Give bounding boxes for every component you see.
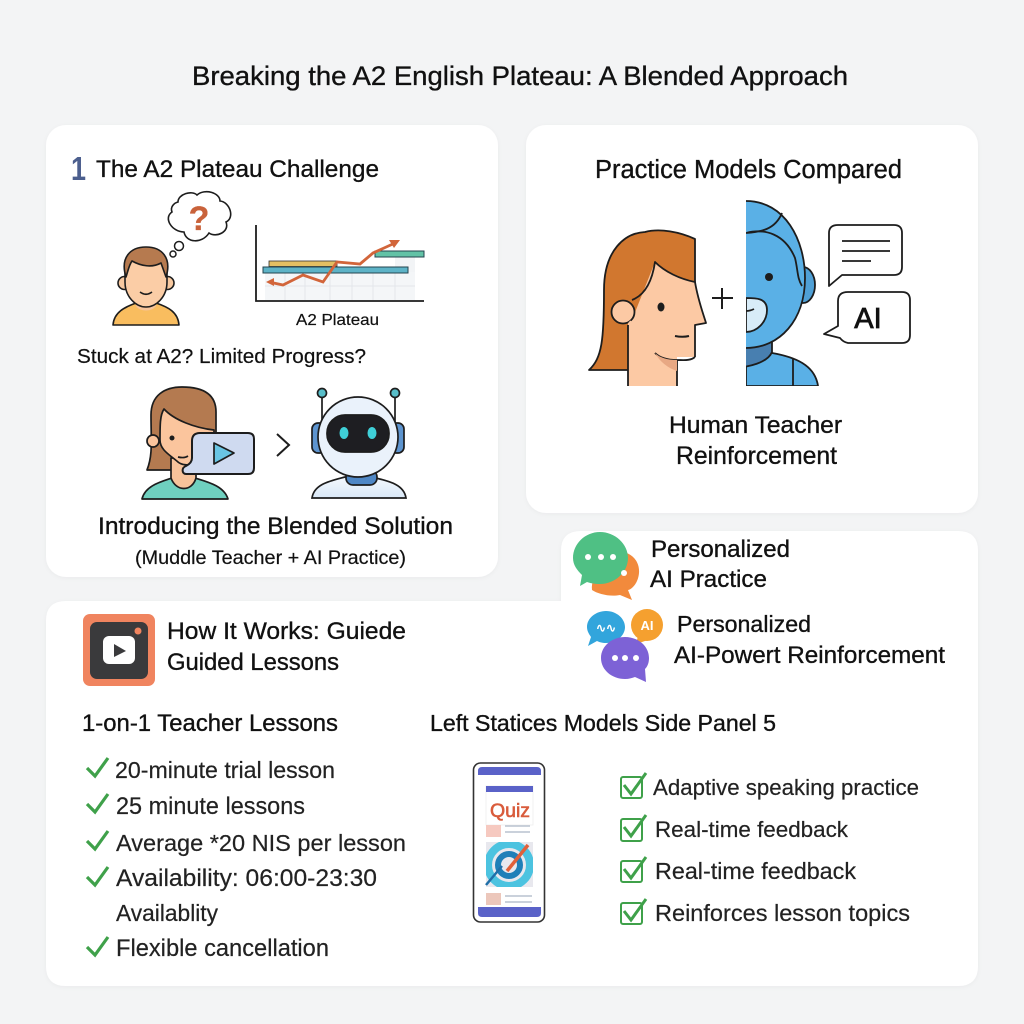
icon: chat bubbles blue, orange and purple: AI bbox=[640, 618, 654, 633]
icon: chat bubbles blue, orange and purple bbox=[587, 609, 663, 682]
heading: how it works bbox=[167, 618, 406, 676]
title: Breaking the A2 English Plateau: A Blended Approach bbox=[192, 60, 848, 91]
list: AI practice features: Real-time feedback bbox=[655, 817, 849, 842]
step number: 1 bbox=[71, 150, 86, 187]
caption line 1: Human Teacher bbox=[669, 412, 842, 439]
list: teacher lesson features bbox=[87, 757, 406, 962]
arrow: chevron bbox=[277, 434, 289, 456]
icon: AI robot half face bbox=[746, 200, 819, 386]
heading: how it works: Guided Lessons bbox=[167, 649, 339, 676]
text: personalized AI-powered reinforcement bbox=[674, 611, 945, 669]
list: AI practice features bbox=[621, 773, 919, 926]
text: personalized AI practice: AI Practice bbox=[650, 566, 767, 593]
icon: teacher with video card bbox=[142, 387, 254, 499]
list: teacher lesson features: Availability: 06:00-23:30 bbox=[116, 865, 377, 892]
panel heading: Practice Models Compared bbox=[595, 156, 902, 184]
panel: practice models compared bbox=[526, 125, 978, 513]
icon: AI speech bubble bbox=[824, 292, 910, 343]
panel: the A2 plateau challenge bbox=[46, 125, 498, 577]
icon: text speech bubble bbox=[829, 225, 902, 286]
list: teacher lesson features: 25 minute lessons bbox=[116, 793, 305, 820]
caption line 2: Reinforcement bbox=[676, 443, 837, 470]
icon: video play bbox=[83, 614, 155, 686]
chart label: A2 Plateau bbox=[296, 312, 379, 329]
text: personalized AI practice: Personalized bbox=[651, 536, 790, 563]
list: AI practice features: Adaptive speaking practice bbox=[653, 775, 919, 800]
panel: how it works bbox=[46, 531, 978, 986]
text: personalized AI practice bbox=[650, 536, 790, 593]
list: AI practice features: Real-time feedback bbox=[655, 858, 856, 884]
subheading: side panel: Left Statices Models Side Panel 5 bbox=[430, 710, 776, 736]
text: personalized AI-powered reinforcement: AI-Powert Reinforcement bbox=[674, 642, 945, 669]
icon: confused learner bbox=[113, 247, 179, 325]
icon: thought bubble with question mark bbox=[168, 192, 231, 257]
icon: chat bubbles blue, orange and purple: ∿∿ bbox=[596, 621, 616, 635]
solution heading: Introducing the Blended Solution bbox=[98, 513, 453, 540]
heading: how it works: How It Works: Guiede bbox=[167, 618, 406, 645]
chart: A2 plateau line chart bbox=[256, 225, 424, 301]
list: teacher lesson features: Availablity bbox=[116, 900, 219, 926]
icon: phone with quiz app: Quiz bbox=[490, 800, 530, 822]
icon: human teacher face bbox=[589, 230, 706, 386]
icon: robot tutor bbox=[312, 388, 406, 498]
question text: Stuck at A2? Limited Progress? bbox=[77, 345, 366, 368]
icon: phone with quiz app bbox=[474, 763, 544, 922]
icon: thought bubble with question mark: ? bbox=[189, 200, 209, 238]
panel heading: The A2 Plateau Challenge bbox=[96, 156, 379, 183]
solution subheading: (Muddle Teacher + AI Practice) bbox=[135, 547, 406, 569]
icon: AI speech bubble: AI bbox=[854, 303, 882, 335]
list: teacher lesson features: Flexible cancellation bbox=[116, 936, 329, 962]
text: personalized AI-powered reinforcement: Personalized bbox=[677, 611, 811, 637]
plus sign bbox=[712, 288, 733, 309]
list: teacher lesson features: 20-minute trial lesson bbox=[115, 757, 335, 783]
list: AI practice features: Reinforces lesson topics bbox=[655, 900, 910, 926]
list: teacher lesson features: Average *20 NIS per lesson bbox=[116, 830, 406, 856]
subheading: teacher lessons: 1-on-1 Teacher Lessons bbox=[82, 711, 338, 737]
icon: chat bubbles green and orange bbox=[573, 532, 639, 600]
